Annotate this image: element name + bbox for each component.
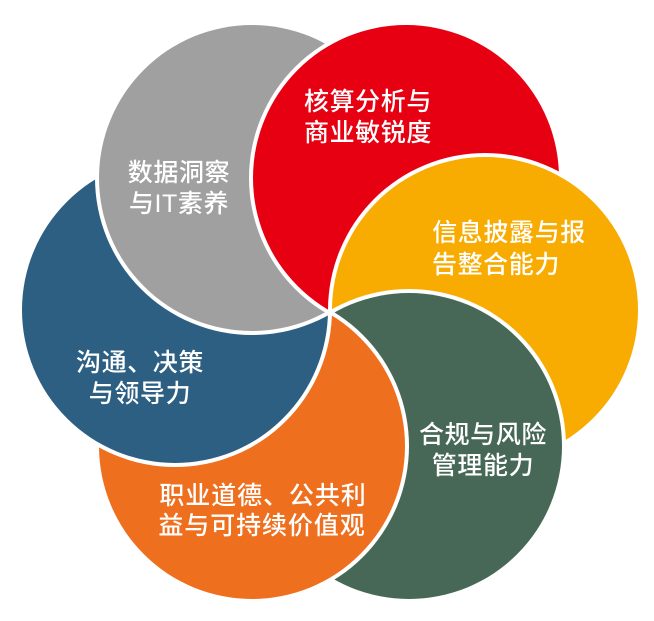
- panel: grey petal, data insight and IT literacy: [99, 25, 325, 331]
- label: compliance and risk management: 管理能力: [432, 452, 534, 480]
- label: disclosure and reporting: 告整合能力: [432, 251, 560, 279]
- label: communication and leadership: 沟通、决策: [76, 349, 204, 377]
- label: accounting and business acumen: 商业敏锐度: [304, 119, 432, 147]
- label: compliance and risk management: 合规与风险: [419, 421, 547, 449]
- panel: green petal, compliance and risk management: [334, 293, 562, 599]
- label: communication and leadership: 与领导力: [89, 380, 191, 408]
- label: disclosure and reporting: 信息披露与报: [432, 219, 586, 247]
- label: ethics and public interest: 益与可持续价值观: [158, 512, 366, 540]
- label: data insight and IT literacy: 与IT素养: [129, 190, 229, 218]
- label: accounting and business acumen: 核算分析与: [304, 88, 432, 116]
- panel: orange petal, ethics and public interest: [99, 293, 405, 599]
- panel: blue petal, communication and leadership: [22, 157, 328, 463]
- panel: yellow petal, disclosure and reporting: [332, 157, 638, 463]
- label: data insight and IT literacy: 数据洞察: [128, 159, 230, 187]
- label: ethics and public interest: 职业道德、公共利: [159, 482, 367, 510]
- panel: red petal, accounting and business acumen: [253, 25, 559, 331]
